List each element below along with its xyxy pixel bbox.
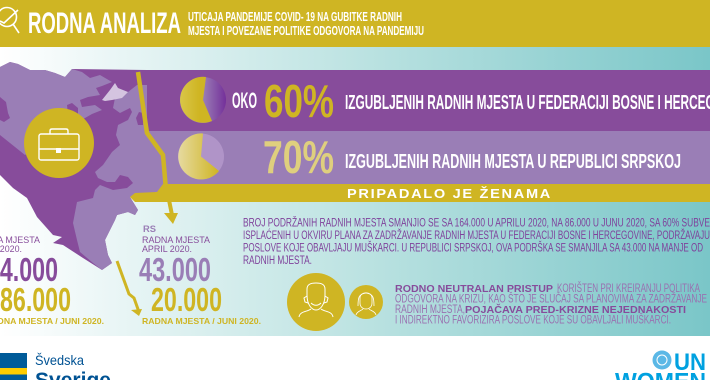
stats: RS jobs: RADNA MJESTA — [142, 235, 211, 246]
text block: gender neutral approach: RODNO NEUTRALAN PRISTUP — [395, 284, 553, 295]
stat row: Federation — [232, 75, 710, 127]
icon: man in gold circle — [287, 273, 345, 331]
stats: RS jobs: 20.000 — [151, 281, 222, 318]
subtitle — [188, 10, 424, 38]
stats: RS jobs: APRIL 2020. — [142, 244, 192, 255]
icon: woman in gold circle — [349, 285, 383, 319]
logo: UN Women: UN — [674, 349, 706, 376]
logo: UN Women — [615, 349, 706, 380]
map of Bosnia and Herzegovina — [0, 62, 167, 270]
map region: east and south — [73, 85, 167, 270]
map region: Brcko — [102, 83, 128, 101]
map region: dark patch — [136, 112, 143, 125]
icon: magnifier with check — [0, 8, 19, 33]
stat row: Federation: 60% — [264, 75, 334, 127]
subtitle: MJESTA I POVEZANE POLITIKE ODGOVORA NA PANDEMIJU — [188, 24, 424, 38]
paragraph: support figures: RADNIH MJESTA. — [243, 255, 312, 267]
text block: gender neutral approach: RADNIH MJESTA, — [395, 304, 465, 316]
icon: briefcase in gold circle — [24, 108, 94, 178]
paragraph: support figures — [243, 216, 710, 267]
map region: west enclave — [0, 97, 10, 122]
logo: Sweden: Švedska — [35, 352, 84, 368]
stat row: Republika Srpska — [263, 131, 681, 183]
stats: Federation jobs — [0, 235, 104, 326]
stat row: Republika Srpska: 70% — [263, 131, 334, 183]
gold connector line — [138, 72, 166, 190]
title: RODNA ANALIZA — [28, 7, 181, 40]
subtitle: UTICAJA PANDEMIJE COVID- 19 NA GUBITKE RADNIH — [188, 10, 402, 24]
map region: north-west — [0, 62, 112, 155]
header bar — [0, 0, 710, 47]
stats: RS jobs: 43.000 — [139, 251, 211, 288]
background gradient panel — [0, 47, 710, 336]
panel: dark purple band — [75, 70, 710, 131]
logo: Sweden — [0, 352, 111, 380]
stats: RS jobs: RADNA MJESTA / JUNI 2020. — [142, 316, 261, 326]
stats: Federation jobs: 86.000 — [0, 281, 71, 318]
arrow: to Federation figures — [117, 261, 142, 316]
band text: PRIPADALO JE ŽENAMA — [347, 186, 552, 201]
stats: RS jobs — [139, 224, 261, 326]
arrow: to RS figures — [164, 200, 178, 224]
panel: light purple band — [147, 131, 710, 184]
pie chart: 70 percent — [178, 133, 224, 180]
panel: gold band — [130, 184, 710, 202]
stats: RS jobs: RS — [143, 224, 156, 234]
text block: gender neutral approach — [395, 282, 707, 326]
pie chart: 60 percent — [180, 77, 226, 123]
map region: small blob — [67, 103, 78, 114]
text block: gender neutral approach: POJAČAVA PRED-KRIZNE NEJEDNAKOSTI — [465, 303, 686, 316]
stat row: Federation: OKO — [232, 88, 257, 113]
